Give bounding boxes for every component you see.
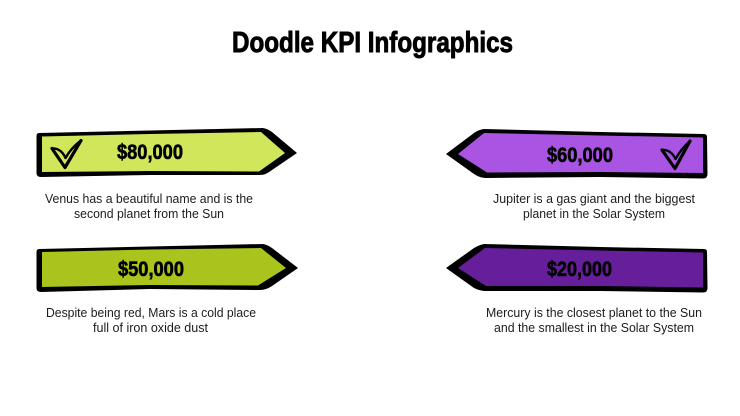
value: $50,000: $50,000 <box>118 258 184 281</box>
text: Jupiter description <box>493 192 696 221</box>
text: Mars description <box>46 306 256 335</box>
text: Mercury description: and the smallest in the Solar System <box>494 321 694 335</box>
icon: check mark <box>662 141 690 168</box>
panel: Mercury KPI <box>446 244 708 335</box>
text: Venus description: second planet from the Sun <box>74 207 224 221</box>
arrow: purple arrow outline <box>446 129 708 178</box>
arrow: olive fill <box>42 248 286 287</box>
title: Doodle KPI Infographics <box>232 27 513 59</box>
panel: Venus KPI <box>36 128 297 221</box>
icon: check mark <box>52 140 81 168</box>
panel: Jupiter KPI <box>446 129 708 221</box>
arrow: dark purple arrow outline <box>446 244 708 292</box>
arrow: olive arrow outline <box>36 244 298 292</box>
text: Mercury description <box>486 306 702 335</box>
text: Mars description: full of iron oxide dust <box>93 321 209 335</box>
arrow: dark purple fill <box>458 248 703 288</box>
text: Mars description: Despite being red, Mars is a cold place <box>46 306 256 320</box>
arrow: lime fill <box>42 132 285 172</box>
text: Venus description: Venus has a beautiful name and is the <box>45 192 253 206</box>
value: $80,000: $80,000 <box>117 141 183 164</box>
text: Jupiter description: Jupiter is a gas giant and the biggest <box>493 192 696 206</box>
text: Venus description <box>45 192 253 221</box>
value: $20,000: $20,000 <box>547 258 612 281</box>
panel: Mars KPI <box>36 244 298 335</box>
arrow: purple fill <box>458 133 703 173</box>
arrow: lime arrow outline <box>36 128 297 177</box>
text: Mercury description: Mercury is the closest planet to the Sun <box>486 306 702 320</box>
text: Jupiter description: planet in the Solar System <box>523 207 665 221</box>
value: $60,000: $60,000 <box>547 144 613 167</box>
